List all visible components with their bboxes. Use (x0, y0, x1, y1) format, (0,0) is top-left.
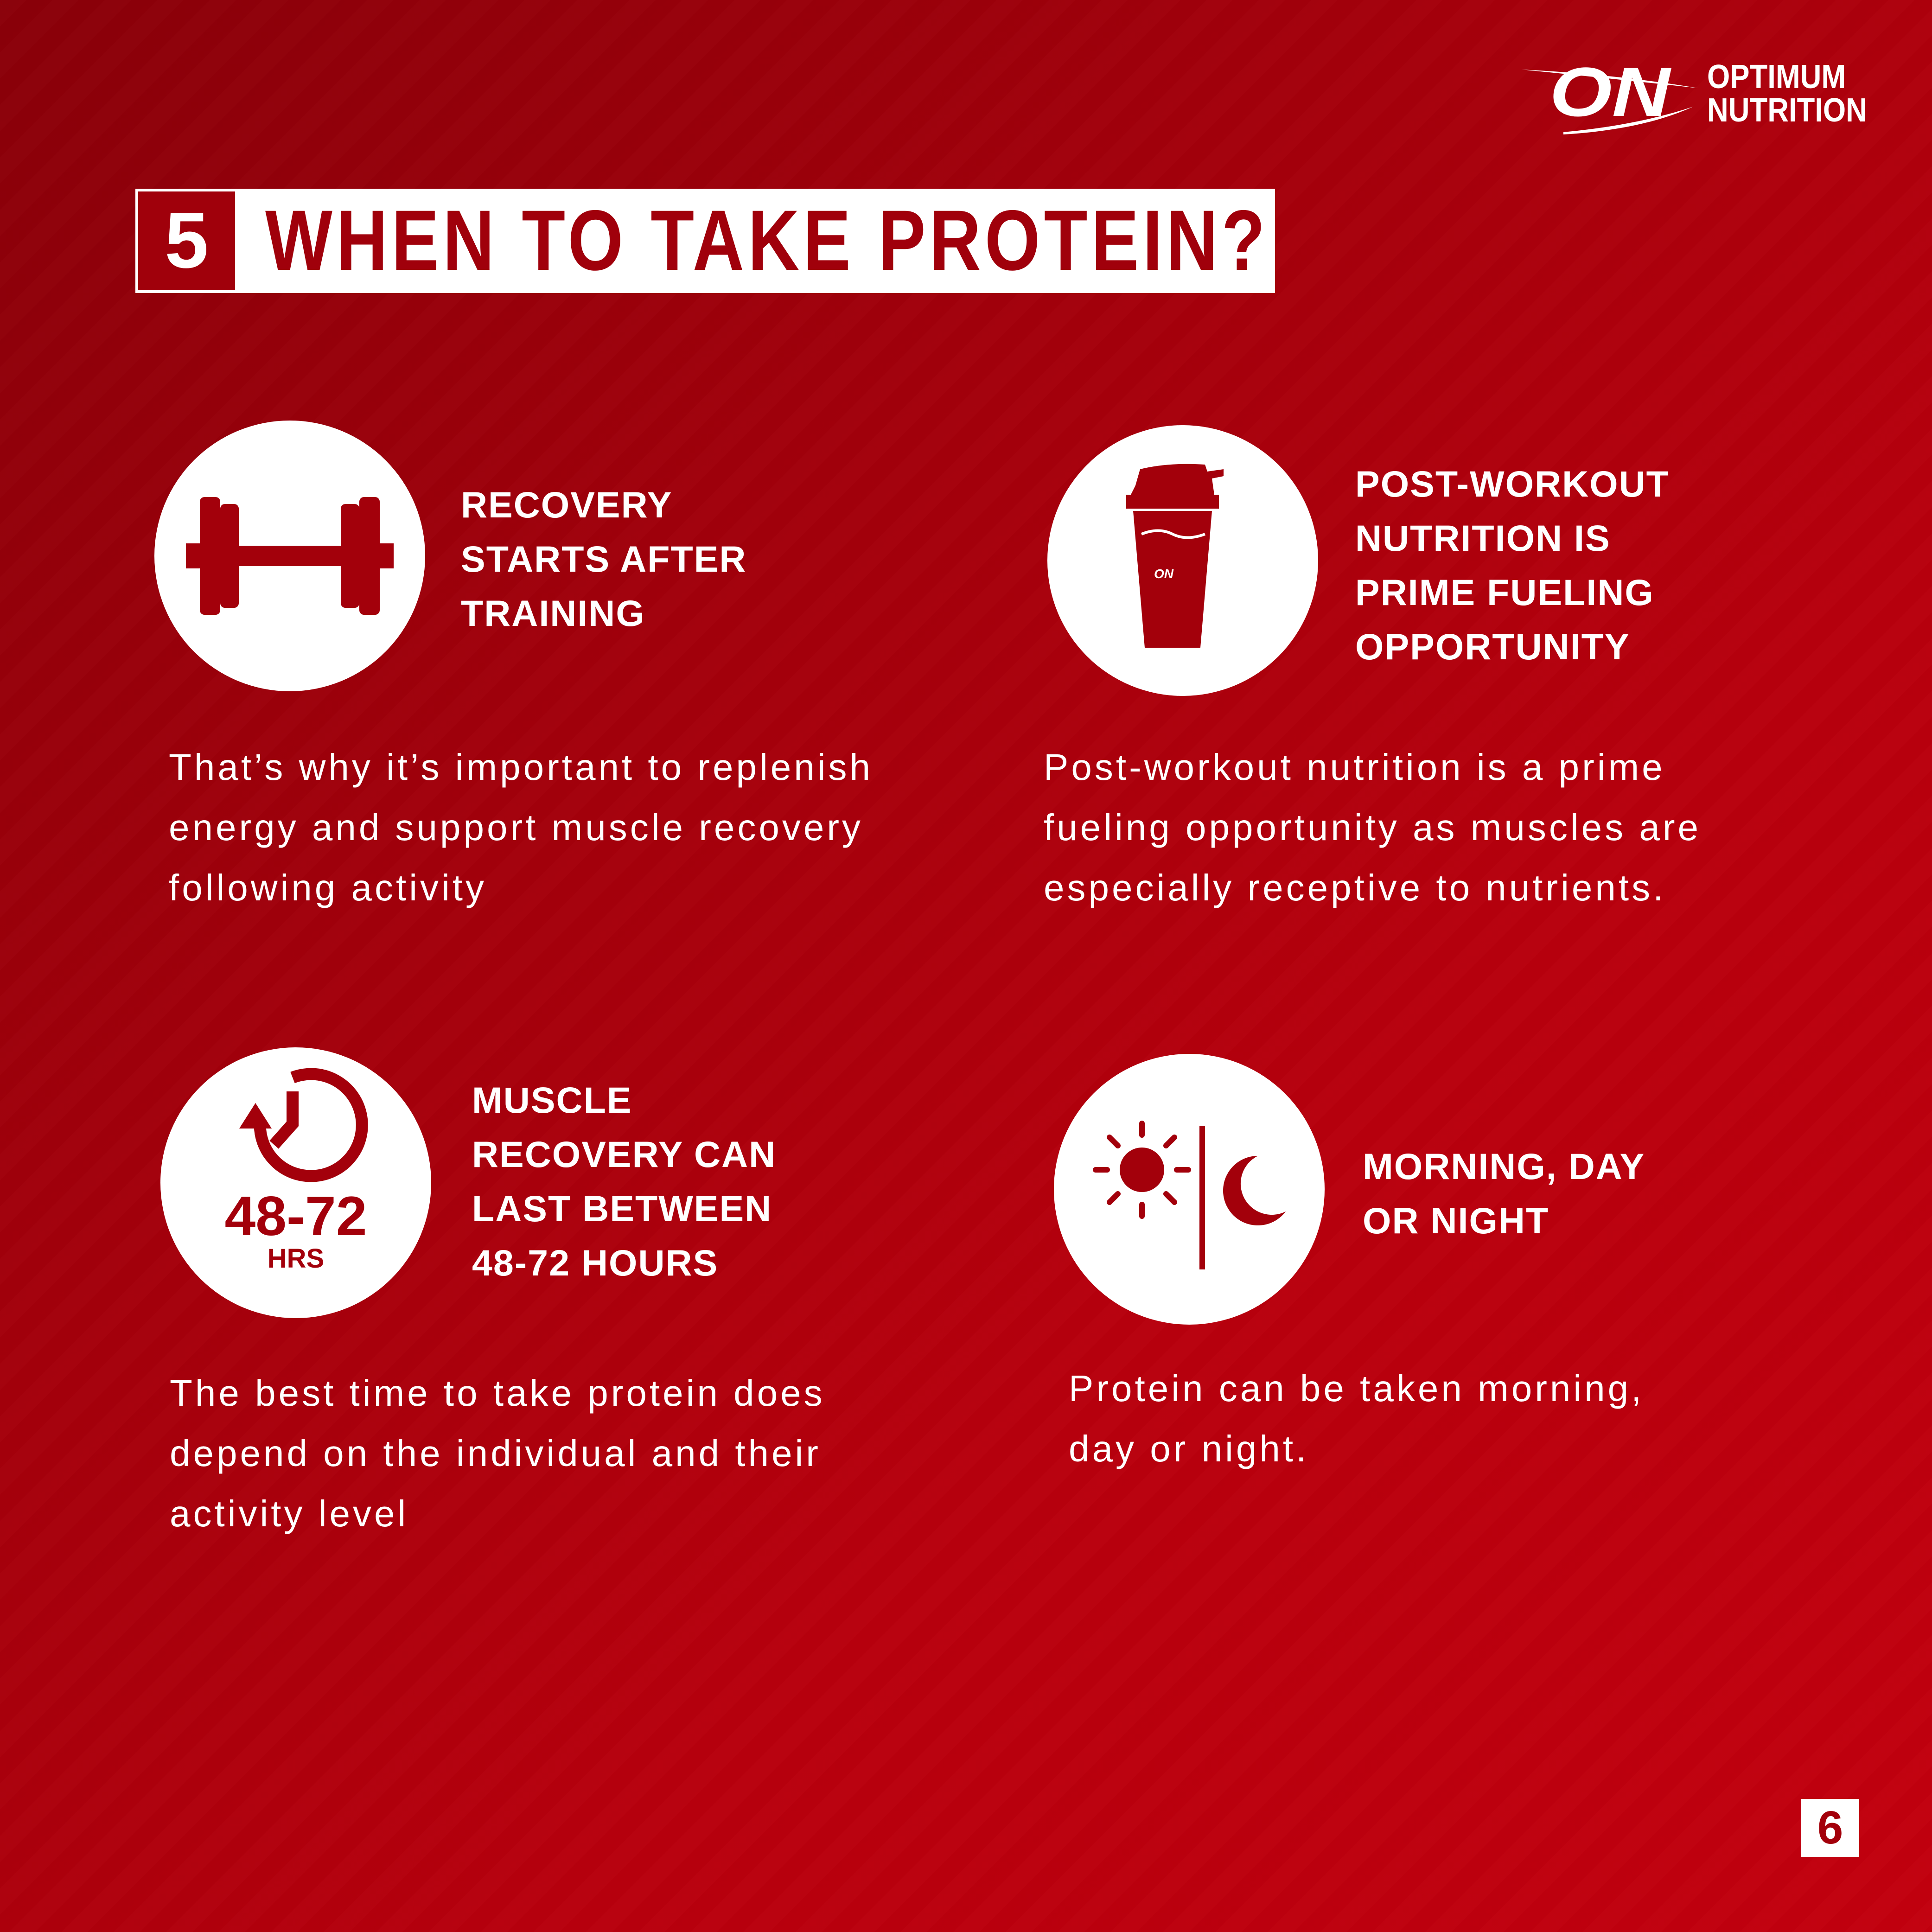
icon: clock 48-72: HRS (268, 1243, 324, 1274)
icon: shaker: ON (1154, 567, 1174, 581)
logo (1522, 56, 1879, 137)
heading: post-workout: OPPORTUNITY (1355, 626, 1630, 667)
heading: muscle recovery: 48-72 HOURS (472, 1242, 718, 1283)
text: best time: activity level (170, 1493, 408, 1534)
page number (1801, 1799, 1859, 1857)
heading: recovery: RECOVERY (461, 484, 672, 525)
icon: dumbbell (154, 421, 425, 691)
heading: morning day night (1363, 1139, 1645, 1248)
text: post-workout: fueling opportunity as muscles are (1044, 807, 1701, 848)
text: best time (170, 1363, 825, 1544)
title number: 5 (165, 197, 209, 285)
text: post-workout (1044, 737, 1701, 918)
text: post-workout: especially receptive to nutrients. (1044, 867, 1666, 908)
heading: post-workout (1355, 457, 1670, 674)
text: recovery: following activity (169, 867, 487, 908)
text: recovery: energy and support muscle recovery (169, 807, 863, 848)
text: recovery (169, 737, 873, 918)
text: best time: depend on the individual and their (170, 1433, 821, 1474)
heading: post-workout: PRIME FUELING (1355, 572, 1654, 613)
title (135, 189, 1275, 293)
text: morning (1069, 1358, 1644, 1479)
heading: muscle recovery: RECOVERY CAN (472, 1134, 776, 1175)
heading: recovery: TRAINING (461, 593, 645, 634)
page number: 6 (1817, 1802, 1843, 1854)
text: morning: day or night. (1069, 1428, 1309, 1469)
icon: clock 48-72 (160, 1047, 431, 1318)
text: recovery: That’s why it’s important to replenish (169, 746, 873, 788)
title number (138, 191, 235, 290)
icon: shaker (1047, 425, 1318, 696)
icon: clock 48-72: 48-72 (225, 1185, 367, 1247)
heading: muscle recovery: LAST BETWEEN (472, 1188, 772, 1229)
heading: post-workout: NUTRITION IS (1355, 517, 1611, 559)
text: best time: The best time to take protein does (170, 1372, 825, 1414)
logo: NUTRITION (1707, 92, 1867, 129)
heading: morning day night: OR NIGHT (1363, 1200, 1549, 1241)
title text: WHEN TO TAKE PROTEIN? (265, 193, 1269, 288)
heading: recovery (461, 478, 746, 640)
logo: OPTIMUM (1707, 58, 1846, 96)
heading: post-workout: POST-WORKOUT (1355, 463, 1670, 504)
icon: sun and moon (1054, 1054, 1325, 1325)
heading: muscle recovery (472, 1073, 776, 1290)
heading: muscle recovery: MUSCLE (472, 1079, 632, 1121)
text: post-workout: Post-workout nutrition is a prime (1044, 746, 1665, 788)
heading: morning day night: MORNING, DAY (1363, 1146, 1645, 1187)
text: morning: Protein can be taken morning, (1069, 1368, 1644, 1409)
heading: recovery: STARTS AFTER (461, 538, 746, 580)
